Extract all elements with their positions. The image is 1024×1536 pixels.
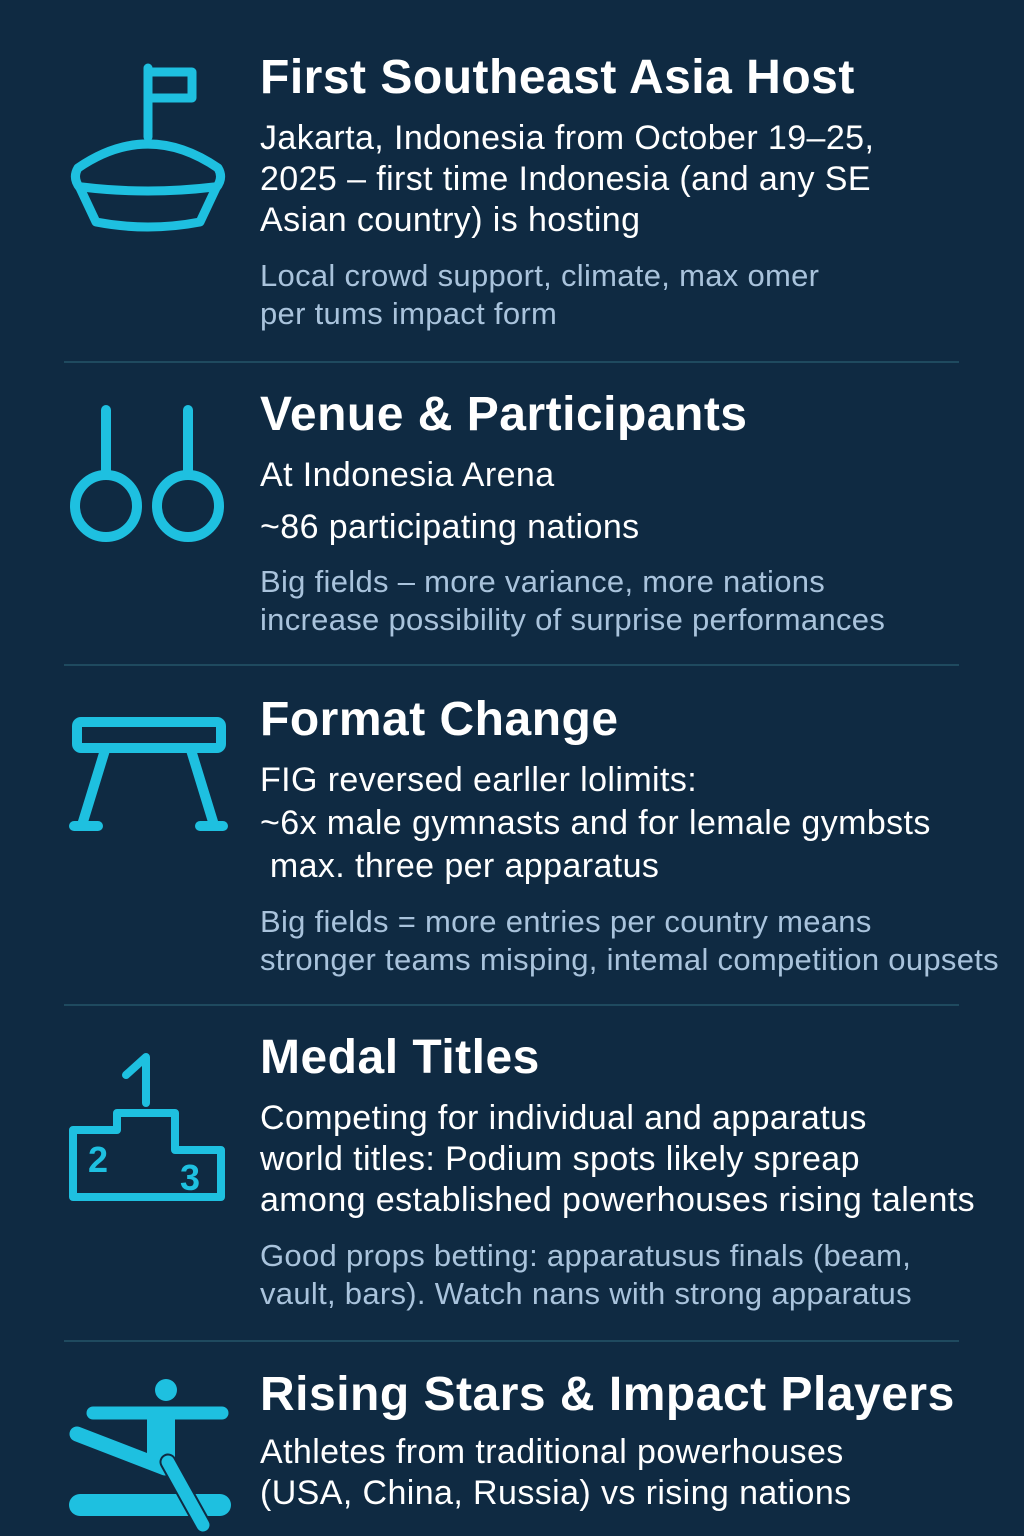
- section 2 note: Big fields – more variance, more nations: [260, 564, 825, 599]
- section 5 heading: Rising Stars & Impact Players: [260, 1368, 955, 1421]
- section 4 body: among established powerhouses rising talents: [260, 1181, 975, 1219]
- section 1 note: [260, 258, 819, 331]
- section 4 note: Good props betting: apparatusus finals (beam,: [260, 1238, 911, 1273]
- section 1 body: [260, 119, 874, 239]
- icon: podium: 2: [88, 1139, 108, 1180]
- icon: podium: [73, 1057, 221, 1198]
- section 3 body: ~6x male gymnasts and for lemale gymbsts: [260, 804, 931, 842]
- section 4 heading: Medal Titles: [260, 1031, 540, 1084]
- section 3 body: max. three per apparatus: [270, 847, 659, 885]
- icon: podium: 3: [180, 1157, 200, 1198]
- icon: flag basket: [75, 68, 221, 227]
- icon: pommel beam: [74, 722, 223, 826]
- section 4 note: [260, 1238, 912, 1311]
- section 5 body: Athletes from traditional powerhouses: [260, 1433, 844, 1471]
- icon: gymnast: [77, 1379, 222, 1525]
- section 2 note: [260, 564, 885, 637]
- section 2 heading: Venue & Participants: [260, 388, 748, 441]
- section 3 body: [260, 761, 931, 885]
- section 3 note: Big fields = more entries per country means: [260, 904, 872, 939]
- section 3 heading: Format Change: [260, 693, 619, 746]
- section 5 body: (USA, China, Russia) vs rising nations: [260, 1474, 852, 1512]
- section 1 body: Asian country) is hosting: [260, 201, 640, 239]
- section 1 note: per tums impact form: [260, 296, 557, 331]
- section 4 body: Competing for individual and apparatus: [260, 1099, 867, 1137]
- section 1 body: Jakarta, Indonesia from October 19–25,: [260, 119, 874, 157]
- section 3 note: stronger teams misping, intemal competition oupsets: [260, 942, 999, 977]
- section 4 body: world titles: Podium spots likely spreap: [260, 1140, 860, 1178]
- section 4 note: vault, bars). Watch nans with strong apparatus: [260, 1276, 912, 1311]
- icon: rings: [75, 410, 219, 537]
- section 2 note: increase possibility of surprise performances: [260, 602, 885, 637]
- section 1 body: 2025 – first time Indonesia (and any SE: [260, 160, 871, 198]
- section 3 body: FIG reversed earller lolimits:: [260, 761, 697, 799]
- section 4 body: [260, 1099, 975, 1219]
- section 1 heading: First Southeast Asia Host: [260, 51, 855, 104]
- section 3 note: [260, 904, 999, 977]
- section 5 body: [260, 1433, 852, 1512]
- section 1 note: Local crowd support, climate, max omer: [260, 258, 819, 293]
- section 2 body: [260, 456, 640, 546]
- section 2 body: ~86 participating nations: [260, 508, 640, 546]
- section 2 body: At Indonesia Arena: [260, 456, 555, 494]
